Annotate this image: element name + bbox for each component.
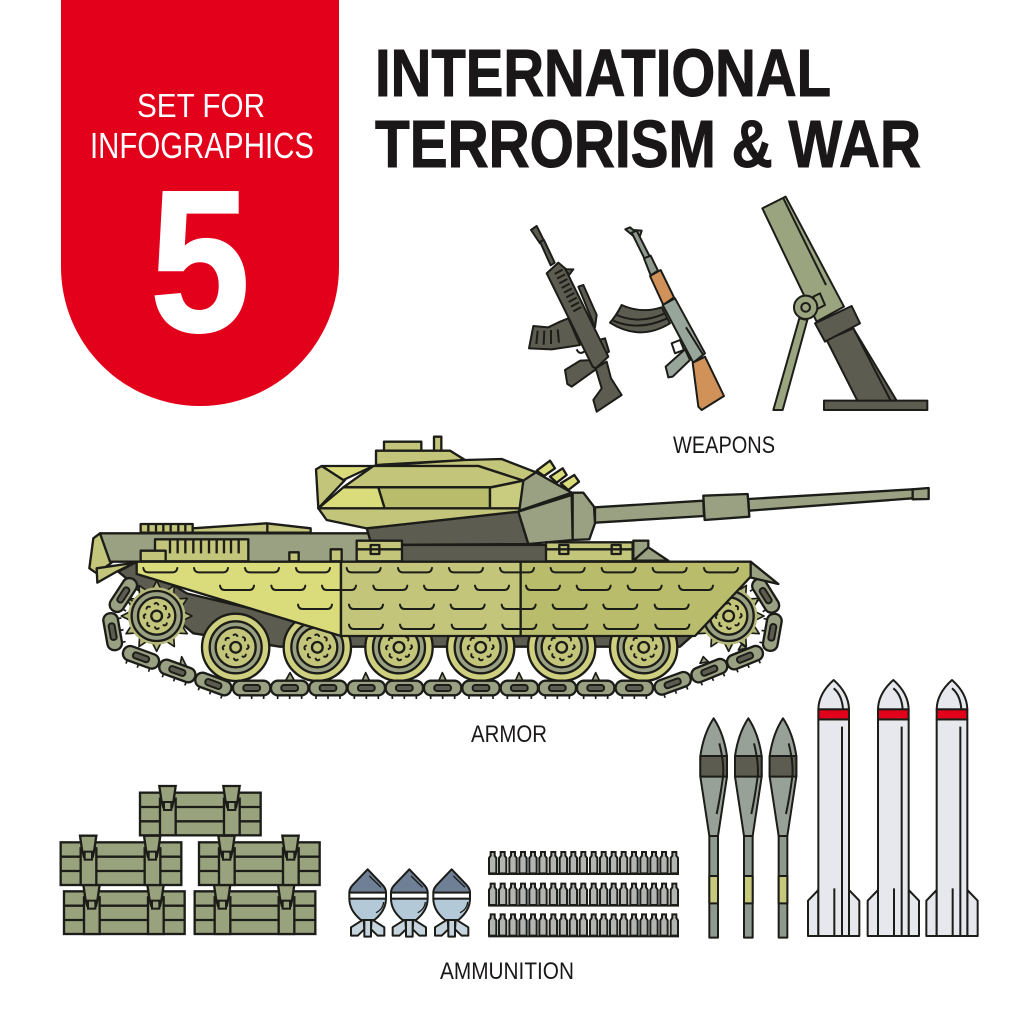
tank (89, 437, 929, 701)
label: ammunition: AMMUNITION (440, 958, 574, 985)
bombs (349, 869, 470, 937)
tank: under-hull (118, 562, 695, 647)
tank: wheels (121, 581, 764, 681)
banner number: 5 (150, 148, 250, 374)
tank: turret (316, 437, 595, 562)
tank: deck (100, 533, 375, 562)
red banner (61, 0, 339, 406)
title: INTERNATIONAL (375, 36, 831, 111)
icon: mortar (762, 197, 927, 410)
icon: assault rifle (529, 226, 622, 412)
weapons group (529, 197, 927, 412)
title (375, 36, 921, 182)
icon: kalashnikov rifle (610, 227, 724, 410)
banner text: set for: SET FOR (137, 87, 265, 124)
tank: hull armor (137, 562, 778, 636)
rockets (700, 718, 796, 938)
tank: track (102, 575, 783, 701)
cartridges (488, 852, 679, 936)
missiles (808, 680, 978, 936)
tank: deck equipment (141, 523, 342, 561)
tank: gun barrel (595, 488, 929, 523)
label: armor: ARMOR (471, 721, 547, 748)
label: weapons: WEAPONS (673, 432, 775, 459)
tank: stowage boxes (357, 541, 668, 561)
ammunition crates (61, 786, 320, 934)
title: TERRORISM & WAR (375, 107, 921, 182)
banner text: infographics: INFOGRAPHICS (90, 125, 314, 166)
tank: rear armor (89, 533, 135, 583)
